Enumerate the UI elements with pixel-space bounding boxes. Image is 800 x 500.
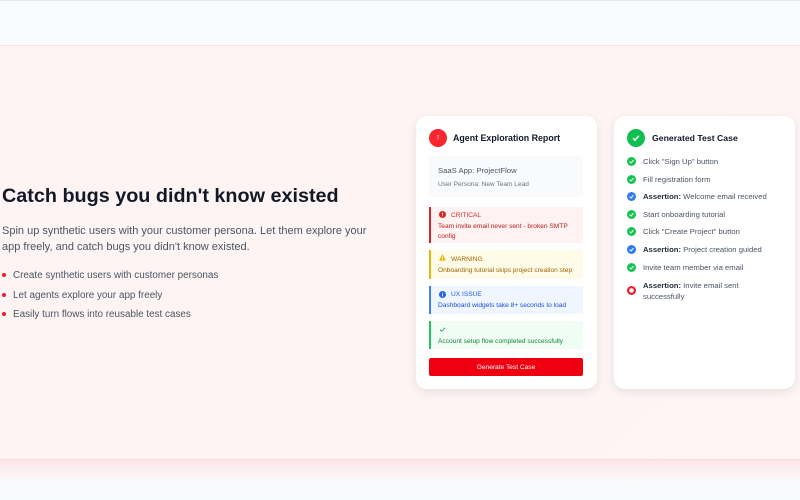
user persona: User Persona: New Team Lead <box>438 181 529 188</box>
step 8: successfully <box>643 292 684 300</box>
issue: warning <box>429 250 583 279</box>
app and persona box <box>429 156 583 197</box>
panel: agent exploration report <box>416 116 597 389</box>
panel: generated test case: Assertion: Invite email sent <box>643 280 739 290</box>
heading: Catch bugs you didn't know existed <box>2 185 339 207</box>
description text: app freely, and catch bugs you didn't know existed. <box>2 240 250 252</box>
test case heading: Generated Test Case <box>652 133 738 143</box>
critical text: config <box>438 233 456 240</box>
success text: Account setup flow completed successfully <box>438 338 563 344</box>
icon: success circle <box>627 129 645 147</box>
critical text <box>438 223 568 240</box>
app name: SaaS App: ProjectFlow <box>438 166 517 175</box>
generate button <box>429 358 583 376</box>
critical text: Team invite email never sent - broken SMTP <box>438 223 568 230</box>
bullet: explore: Let agents explore your app freely <box>13 290 162 301</box>
step 6: Assertion: Project creation guided <box>643 244 762 254</box>
top header band <box>0 0 800 45</box>
warning label: WARNING <box>451 256 483 262</box>
step 1: Click "Sign Up" button <box>643 156 718 166</box>
icon: check <box>440 328 446 332</box>
issue: ux <box>429 286 583 314</box>
report heading: Agent Exploration Report <box>453 133 560 143</box>
step 4: Start onboarding tutorial <box>643 210 725 218</box>
warning text: Onboarding tutorial skips project creation step <box>438 266 572 274</box>
critical label: CRITICAL <box>451 212 481 219</box>
step 2: Fill registration form <box>643 174 710 184</box>
panel: generated test case <box>614 116 795 389</box>
icon: alert circle: ! <box>437 133 439 142</box>
ux text: Dashboard widgets take 8+ seconds to load <box>438 302 566 309</box>
bullet: personas: Create synthetic users with customer personas <box>13 270 218 281</box>
icon: alert circle <box>429 129 447 147</box>
issue: critical <box>429 207 583 243</box>
generate button: Generate Test Case <box>477 364 535 371</box>
feature list <box>2 270 218 320</box>
description text <box>2 225 366 252</box>
step 7: Invite team member via email <box>643 262 743 272</box>
step 3: Assertion: Welcome email received <box>643 192 767 201</box>
bottom band <box>0 460 800 500</box>
description text: Spin up synthetic users with your customer persona. Let them explore your <box>2 225 366 237</box>
issue: success <box>429 321 583 349</box>
bullet: test cases: Easily turn flows into reusable test cases <box>13 309 191 320</box>
ux label: UX ISSUE <box>451 291 482 298</box>
icon: critical <box>439 211 446 218</box>
icon: warning <box>439 254 446 261</box>
step 8 <box>627 280 739 300</box>
step 5: Click "Create Project" button <box>643 227 740 236</box>
icon: info <box>439 291 446 298</box>
